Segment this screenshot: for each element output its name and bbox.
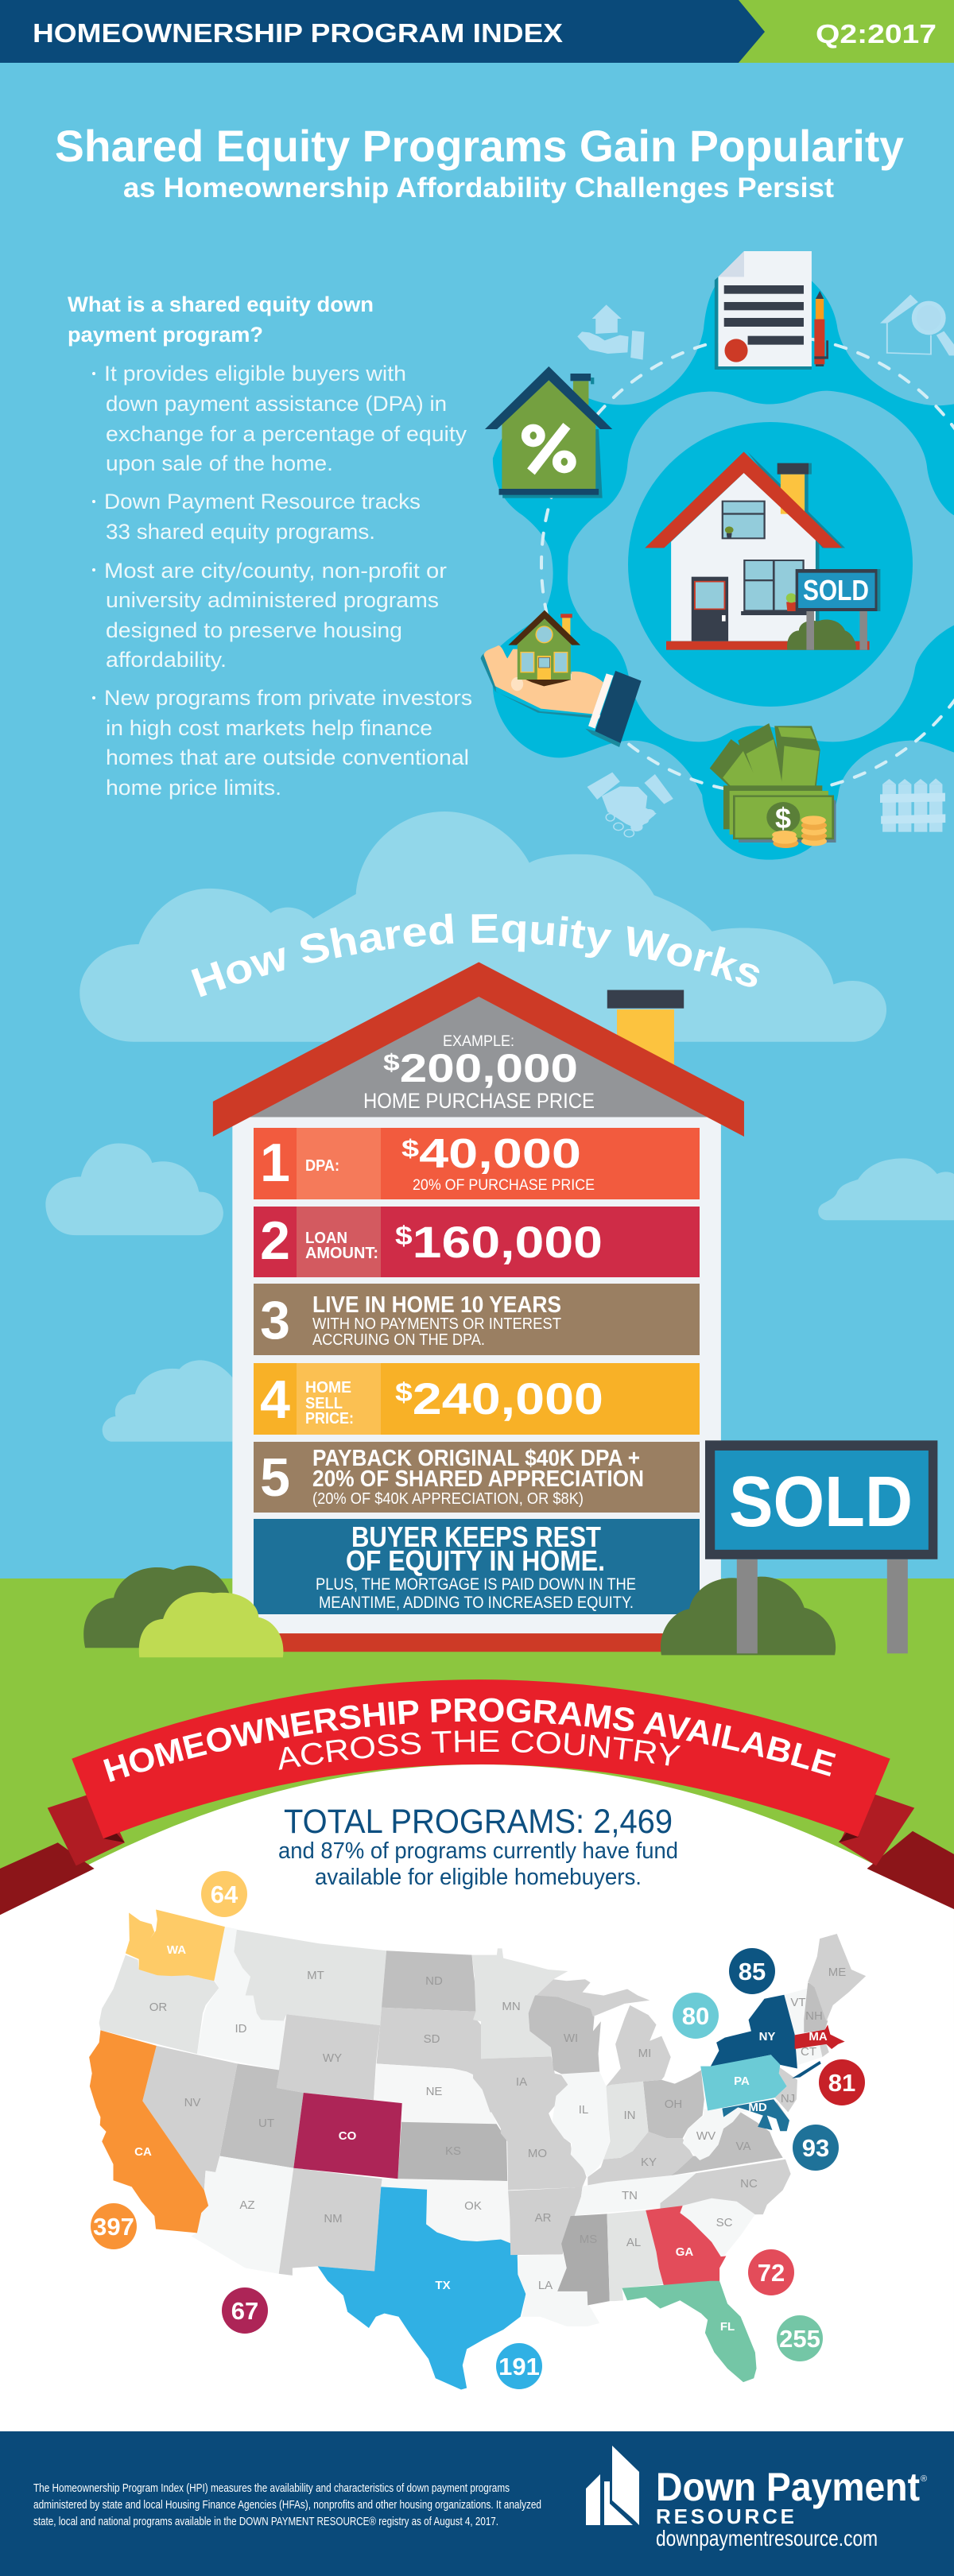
heading: how shared equity works: How Shared Equity Works [191,913,760,997]
text block: what is a shared equity down payment program: What is a shared equity down [68,292,374,316]
grass [0,1579,954,2024]
footnote: administered by state and local Housing Finance Agencies (HFAs), nonprofits and other housing organizations. It analyzed [33,2498,541,2512]
house structure [213,962,744,1652]
state labels: OR [149,2001,167,2014]
state labels: CT [801,2045,816,2059]
step 4: $ [395,1377,413,1407]
icon: contract document and pen [715,251,828,370]
step 2: AMOUNT: [305,1245,378,1262]
step 5: PAYBACK ORIGINAL $40K DPA + [312,1446,640,1471]
footnote: The Homeownership Program Index (HPI) measures the availability and characteristics of down payment programs [33,2481,510,2495]
step 5: 5 [260,1447,290,1508]
state labels: AR [535,2211,552,2225]
step 1: 40,000 [419,1131,581,1177]
price example: HOME PURCHASE PRICE [363,1089,595,1113]
total programs [278,1803,678,1890]
banner: homeownership programs available across the country [0,1679,954,1916]
result: buyer keeps rest of equity [254,1519,700,1614]
logo: down payment resource: ® [921,2474,927,2484]
faded icons [577,295,954,360]
text block: what is a shared equity down payment program: university administered programs [106,588,439,612]
state: pennsylvania [700,2055,787,2111]
state labels: NE [426,2085,442,2098]
state labels: MA [809,2030,828,2043]
step 1: 20% OF PURCHASE PRICE [413,1177,595,1194]
icon: sold house [645,451,880,650]
state labels: IN [623,2109,636,2122]
program count bubbles: 85 [739,1958,766,1985]
state labels: IA [516,2075,527,2089]
step 1: $ [401,1134,419,1162]
program count bubbles: 93 [802,2134,829,2162]
header bar: Q2:2017 [816,19,937,48]
text block: what is a shared equity down payment program: down payment assistance (DPA) in [106,392,447,416]
banner: homeownership programs available across the country: HOMEOWNERSHIP PROGRAMS AVAILABLE [103,1698,836,1782]
step 3: LIVE IN HOME 10 YEARS [312,1292,561,1318]
white dome background [0,1764,954,2431]
illustration: shared equity concept circle: $ [775,802,791,835]
state labels: SC [716,2216,733,2229]
state labels: MI [638,2047,651,2060]
state labels: SD [424,2032,440,2046]
state labels: AL [626,2236,641,2249]
price example: $ [383,1050,400,1076]
price example: 200,000 [400,1046,578,1090]
state labels: MT [307,1969,324,1982]
eastern states [472,1934,866,2382]
state labels: VA [736,2140,750,2153]
background blobs [492,278,954,860]
total programs: and 87% of programs currently have fund [278,1838,678,1864]
state labels: NH [805,2009,823,2023]
sold sign: SOLD [729,1462,913,1542]
title: Shared Equity Programs Gain Popularity [55,121,904,171]
state labels: GA [676,2245,693,2259]
state labels: ME [828,1966,846,1979]
state labels: NY [759,2030,775,2043]
title [55,121,904,203]
logo: down payment resource [586,2446,927,2551]
header bar: HOMEOWNERSHIP PROGRAM INDEX [33,18,563,48]
state labels: IL [579,2103,588,2117]
state labels: CO [339,2129,357,2143]
logo: down payment resource: Down Payment [656,2465,920,2509]
state: maryland [722,2099,789,2131]
state labels: WV [696,2129,716,2143]
bushes [83,1566,836,1657]
program count bubbles: 64 [211,1881,238,1908]
state labels: NC [740,2177,758,2191]
state labels: WI [564,2032,578,2045]
text block: what is a shared equity down payment program: upon sale of the home. [106,451,333,475]
step 4: PRICE: [305,1410,354,1427]
sold sign [705,1440,937,1653]
step 5: 20% OF SHARED APPRECIATION [312,1466,644,1492]
program count bubbles: 191 [498,2353,540,2380]
state labels: TX [435,2279,451,2292]
step 4: HOME [305,1379,351,1396]
illustration: shared equity concept circle [481,251,954,860]
footer [0,2431,954,2576]
state labels: WY [323,2051,342,2065]
icon: hand holding house [481,610,642,747]
step 4: 240,000 [413,1373,603,1424]
footnote: state, local and national programs available in the DOWN PAYMENT RESOURCE® registry as of August 4, 2017. [33,2515,498,2528]
western states [89,1909,525,2390]
program count bubbles: 72 [758,2259,785,2287]
banner: homeownership programs available across the country: ACROSS THE COUNTRY [278,1730,681,1770]
text block: what is a shared equity down payment program: home price limits. [106,776,281,800]
text block: what is a shared equity down payment program [68,292,472,800]
text block: what is a shared equity down payment program: 33 shared equity programs. [106,520,375,544]
title: as Homeownership Affordability Challenges Persist [123,172,834,203]
state labels: CA [134,2145,152,2159]
text block: what is a shared equity down payment program: exchange for a percentage of equity [106,422,467,446]
text block: what is a shared equity down payment program: New programs from private investors [104,686,472,710]
state labels: LA [538,2279,553,2292]
step 3: ACCRUING ON THE DPA. [312,1331,485,1349]
text block: what is a shared equity down payment program: payment program? [68,323,263,347]
state labels: OH [665,2098,682,2111]
state: florida [622,2281,757,2382]
state: massachusetts [795,2024,845,2049]
state: california [89,2030,208,2233]
illustration: shared equity concept circle: SOLD [803,574,869,606]
state labels: UT [258,2117,274,2130]
price example [363,1033,595,1113]
step 1: 1 [260,1133,290,1193]
program count bubbles: 67 [231,2297,258,2325]
state labels: MS [580,2233,597,2246]
total programs: TOTAL PROGRAMS: 2,469 [284,1803,673,1841]
step 2: 160,000 [413,1217,603,1267]
state labels: MN [502,2000,521,2013]
state labels: AZ [239,2198,255,2212]
text block: what is a shared equity down payment program: affordability. [106,648,227,672]
state labels [134,1943,846,2334]
state: georgia [646,2206,726,2289]
text block: what is a shared equity down payment program: Most are city/county, non-profit or [104,559,447,583]
header bar [0,0,954,63]
state: texas [318,2187,525,2390]
price example: EXAMPLE: [443,1033,514,1050]
state labels: FL [720,2320,735,2334]
clouds [45,812,954,1442]
state labels: KS [445,2144,461,2158]
footnote [33,2481,541,2528]
step 1 [254,1128,700,1199]
map of the united states [89,1871,866,2390]
step 5: (20% OF $40K APPRECIATION, OR $8K) [312,1490,584,1508]
state labels: ND [425,1974,443,1988]
step 2 [254,1207,700,1277]
state: new york [710,1995,821,2078]
program count bubbles [91,1871,865,2389]
result: buyer keeps rest of equity: PLUS, THE MORTGAGE IS PAID DOWN IN THE [316,1575,636,1594]
step 2: 2 [260,1211,290,1271]
text block: what is a shared equity down payment program: Down Payment Resource tracks [104,490,421,513]
text block: what is a shared equity down payment program: designed to preserve housing [106,618,402,642]
step 4 [254,1363,700,1435]
text block: what is a shared equity down payment program: homes that are outside conventional [106,746,469,769]
logo: down payment resource: RESOURCE [656,2504,794,2528]
step 1: DPA: [305,1157,339,1175]
state labels: PA [734,2074,750,2088]
program count bubbles: 81 [828,2069,855,2097]
icon: house with percent sign [485,366,612,498]
state labels: KY [641,2156,657,2169]
state labels: OK [464,2199,482,2213]
icon: money and coins [710,723,836,848]
state labels: VT [790,1996,806,2009]
result: buyer keeps rest of equity: BUYER KEEPS REST [351,1520,601,1553]
result: buyer keeps rest of equity: OF EQUITY IN HOME. [346,1544,605,1577]
program count bubbles: 255 [779,2325,820,2353]
state labels: MO [528,2147,547,2160]
step 3 [254,1284,700,1355]
state labels: MD [748,2101,767,2114]
step 2: $ [395,1221,413,1250]
state labels: NV [184,2096,200,2109]
step 4: 4 [260,1369,290,1430]
state labels: TN [622,2189,638,2202]
step 5 [254,1442,700,1513]
state labels: NJ [781,2092,795,2105]
program count bubbles: 397 [93,2213,134,2241]
house: how shared equity works steps [213,962,744,1652]
program count bubbles: 80 [682,2002,709,2030]
text block: what is a shared equity down payment program: It provides eligible buyers with [104,362,406,385]
state: washington [126,1909,225,1981]
step 4: SELL [305,1395,343,1412]
logo: down payment resource: downpaymentresource.com [656,2526,878,2551]
state: colorado [293,2093,402,2179]
state labels: ID [235,2022,247,2036]
state labels: WA [167,1943,186,1957]
text block: what is a shared equity down payment program: in high cost markets help finance [106,716,432,740]
step 3: 3 [260,1290,290,1350]
result: buyer keeps rest of equity: MEANTIME, ADDING TO INCREASED EQUITY. [319,1594,634,1612]
state labels: NM [324,2212,343,2225]
step 3: WITH NO PAYMENTS OR INTEREST [312,1315,561,1333]
total programs: available for eligible homebuyers. [315,1865,642,1890]
step 2: LOAN [305,1230,347,1247]
